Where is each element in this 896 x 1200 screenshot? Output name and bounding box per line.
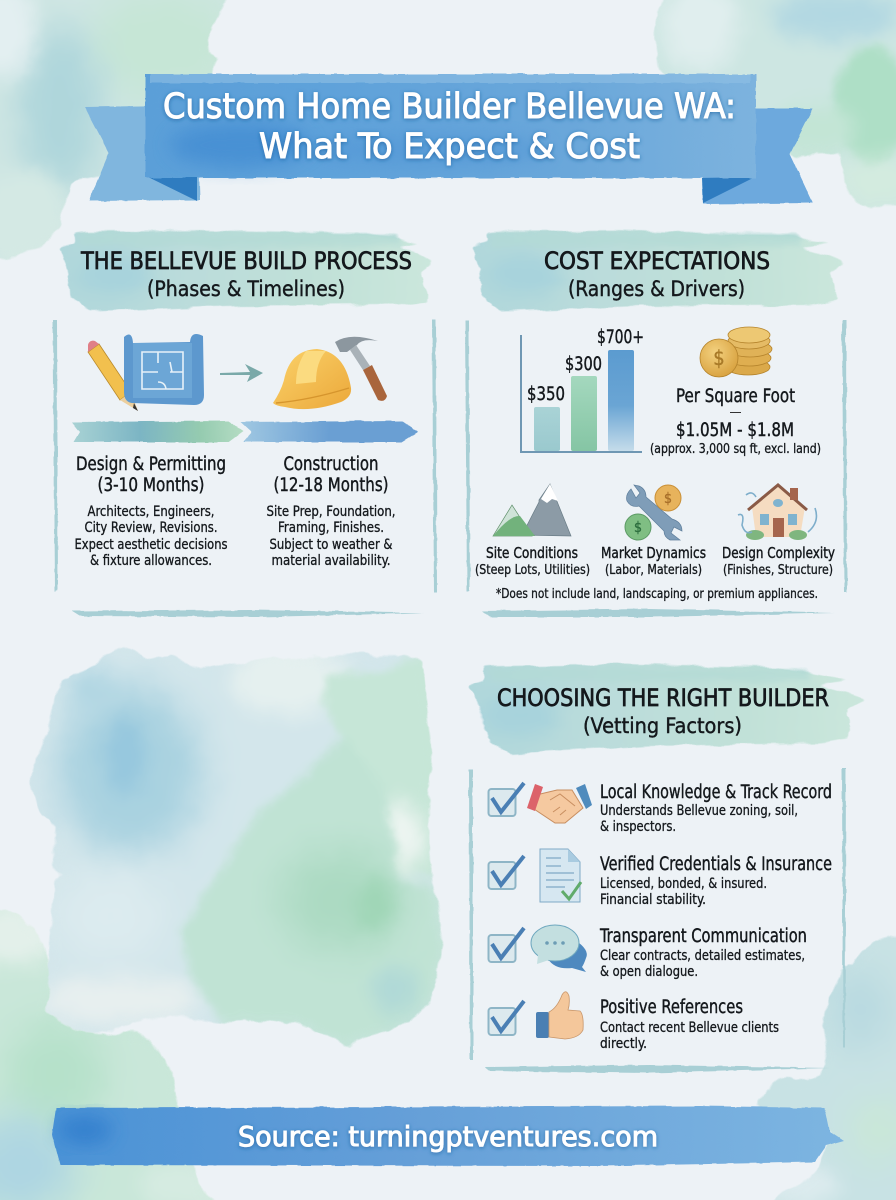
icon: checkbox <box>488 928 524 962</box>
cost driver labels: (Labor, Materials) <box>605 563 702 578</box>
watercolor wash: top right <box>640 0 896 210</box>
checklist item: references: Contact recent Bellevue clients <box>600 1020 779 1036</box>
icon: checkbox <box>488 856 524 889</box>
cost driver labels: Market Dynamics <box>601 544 706 562</box>
cost driver labels <box>475 544 835 578</box>
phase: construction: Subject to weather & <box>270 537 393 553</box>
footer source text: Source: turningptventures.com <box>238 1120 658 1153</box>
timeline bar: design <box>72 421 243 442</box>
cost summary: (approx. 3,000 sq ft, excl. land) <box>650 441 821 457</box>
banner right tail <box>700 108 813 204</box>
icon: blueprint <box>124 334 204 405</box>
banner left fold <box>146 176 197 201</box>
heading: vetting: (Vetting Factors) <box>583 714 742 738</box>
bar chart: cost per square foot: $350 <box>527 384 565 405</box>
phase: design and permitting <box>74 454 228 569</box>
checklist item: credentials: Verified Credentials & Insurance <box>600 854 832 875</box>
phase: design and permitting: Expect aesthetic decisions <box>74 537 228 553</box>
panel frame <box>53 320 437 617</box>
checklist item: local knowledge: & inspectors. <box>600 819 676 835</box>
footer banner <box>52 1106 844 1166</box>
icon: thumbs up <box>536 992 583 1039</box>
banner right fold <box>702 177 755 203</box>
panel: choosing the right builder <box>468 664 866 1073</box>
heading: cost <box>544 247 770 301</box>
cost summary <box>650 386 821 457</box>
watercolor wash: top left <box>0 0 240 270</box>
title text <box>163 87 736 167</box>
cost driver labels: Design Complexity <box>722 544 835 562</box>
icon: house <box>738 485 816 540</box>
watercolor wash: centre panel <box>20 640 450 1060</box>
checklist item: credentials: Licensed, bonded, & insured. <box>600 876 767 892</box>
banner body <box>145 74 756 178</box>
checklist item: communication: Clear contracts, detailed estimates, <box>600 948 805 964</box>
title text: What To Expect & Cost <box>259 127 640 167</box>
checklist item: credentials: Financial stability. <box>600 892 706 908</box>
cost driver labels: (Steep Lots, Utilities) <box>475 563 590 578</box>
heading: vetting <box>497 684 829 738</box>
heading: cost: (Ranges & Drivers) <box>568 277 745 301</box>
checklist item: communication: Transparent Communication <box>599 926 807 947</box>
heading: build process: (Phases & Timelines) <box>147 277 345 301</box>
cost driver labels: (Finishes, Structure) <box>723 563 833 578</box>
heading: vetting: CHOOSING THE RIGHT BUILDER <box>497 684 829 712</box>
arrow: design to construction <box>220 364 263 382</box>
title banner <box>85 74 813 204</box>
icon: handshake <box>527 784 592 823</box>
icon: document <box>540 849 581 902</box>
bar chart: cost per square foot <box>520 327 644 453</box>
checklist item: communication <box>488 925 807 980</box>
cost driver labels: Site Conditions <box>486 544 578 562</box>
checklist item: references: Positive References <box>600 997 743 1018</box>
icon: wrench and coins: $ <box>664 491 672 507</box>
checklist item: communication: & open dialogue. <box>600 964 698 980</box>
cost summary: Per Square Foot <box>676 386 795 407</box>
watercolor wash: bottom right <box>756 936 896 1200</box>
panel frame <box>465 320 847 617</box>
panel: build process <box>53 231 437 617</box>
icon: chat bubbles <box>531 925 587 972</box>
heading: build process <box>80 247 412 301</box>
icon: wrench and coins <box>625 485 682 540</box>
checklist item: local knowledge: Local Knowledge & Track Record <box>600 782 832 803</box>
phase: construction: material availability. <box>272 553 390 569</box>
phase: construction: Framing, Finishes. <box>278 520 384 536</box>
icon: wrench and coins: $ <box>634 520 642 536</box>
heading brush: vetting <box>468 664 866 754</box>
timeline bar: construction <box>241 421 418 442</box>
checklist item: references <box>488 992 779 1052</box>
footer brush <box>52 1106 844 1166</box>
panel: cost expectations <box>465 231 847 617</box>
icon: hard hat <box>273 349 351 409</box>
phase: design and permitting: Architects, Engineers, <box>88 504 214 520</box>
icon: coins <box>700 327 772 377</box>
heading: build process: THE BELLEVUE BUILD PROCESS <box>80 247 412 275</box>
checklist item: credentials <box>488 849 832 908</box>
banner left tail <box>85 105 200 201</box>
checklist item: local knowledge: Understands Bellevue zoning, soil, <box>600 803 798 819</box>
heading: cost: COST EXPECTATIONS <box>544 247 770 275</box>
cost summary: $1.05M - $1.8M <box>676 420 794 441</box>
title text: Custom Home Builder Bellevue WA: <box>163 87 736 127</box>
phase: construction: (12-18 Months) <box>274 475 388 496</box>
icon: checkbox <box>488 783 524 816</box>
phase: design and permitting: & fixture allowances. <box>90 553 212 569</box>
icon: checkbox <box>488 1001 524 1035</box>
icon: pencil <box>88 341 138 411</box>
heading brush: build process <box>60 231 434 311</box>
phase: design and permitting: City Review, Revisions. <box>84 520 218 536</box>
checklist item: references: directly. <box>600 1036 647 1052</box>
phase: construction: Construction <box>284 454 378 475</box>
icon: hammer <box>335 337 387 401</box>
bar chart: cost per square foot: $700+ <box>597 327 644 348</box>
watercolor wash: bottom left <box>0 910 214 1200</box>
icon: coins: $ <box>713 346 725 370</box>
checklist item: local knowledge <box>488 782 832 835</box>
phase: design and permitting: (3-10 Months) <box>98 475 204 496</box>
phase: design and permitting: Design & Permitting <box>76 454 226 475</box>
panel frame <box>469 768 846 1073</box>
footnote: *Does not include land, landscaping, or premium appliances. <box>496 587 818 602</box>
icon: mountains <box>493 484 571 536</box>
heading brush: cost <box>472 231 846 311</box>
bar chart: cost per square foot: $300 <box>565 354 602 375</box>
phase: construction: Site Prep, Foundation, <box>266 504 396 520</box>
phase: construction <box>266 454 396 569</box>
